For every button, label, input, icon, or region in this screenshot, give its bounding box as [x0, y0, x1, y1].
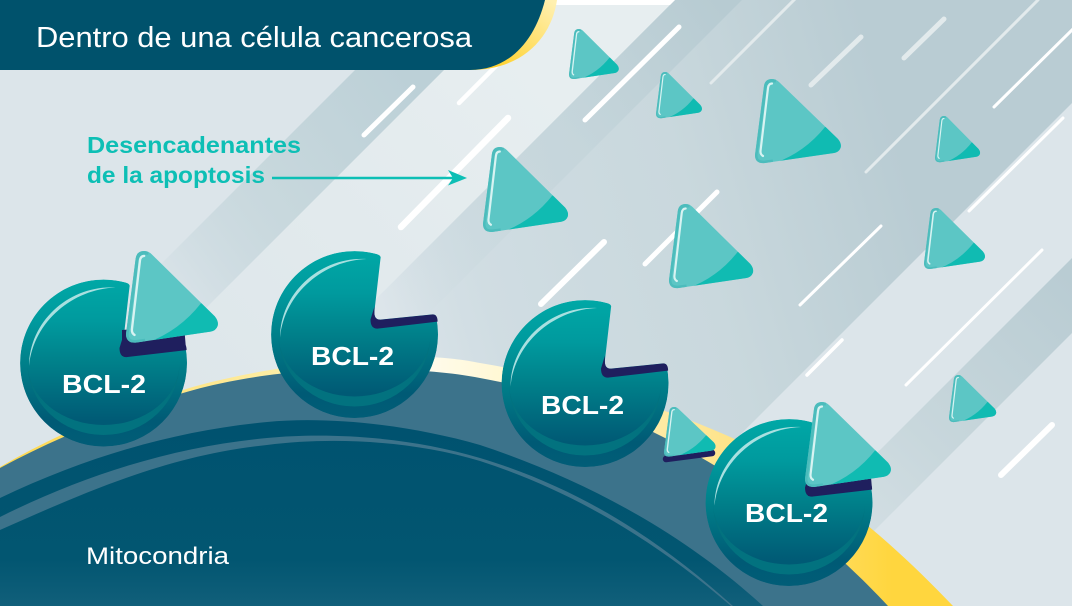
callout: apoptosis triggers: Desencadenantes: [87, 132, 301, 158]
arrow: [272, 170, 467, 186]
BCL-2 protein 2: BCL-2: [311, 341, 394, 371]
trigger 6: [935, 116, 988, 168]
trigger 2: [483, 147, 582, 243]
trigger 4: [569, 29, 627, 86]
header banner: [0, 0, 557, 70]
title: Dentro de una célula cancerosa: [36, 22, 473, 54]
BCL-2 protein 3: [502, 300, 669, 467]
trigger 3: [669, 204, 767, 299]
callout: apoptosis triggers: de la apoptosis: [87, 162, 265, 188]
mitochondrion: [0, 357, 953, 606]
callout: apoptosis triggers: [87, 132, 467, 188]
trigger docked on membrane: [664, 407, 724, 463]
trigger 8: [949, 375, 1004, 428]
BCL-2 protein 4 with bound trigger: [706, 402, 905, 586]
trigger 5: [656, 72, 710, 124]
trigger 1: [755, 79, 855, 174]
trigger 7: [924, 208, 995, 277]
label: Mitocondria: Mitocondria: [86, 543, 230, 570]
BCL-2 protein 3: BCL-2: [541, 390, 624, 420]
white streaks: [364, 0, 1072, 475]
BCL-2 protein 1 with bound trigger: BCL-2: [62, 369, 146, 399]
BCL-2 protein 2: [271, 251, 438, 418]
BCL-2 protein 4 with bound trigger: BCL-2: [745, 498, 828, 528]
free apoptosis triggers: [483, 29, 1004, 428]
BCL-2 protein 1 with bound trigger: [20, 251, 233, 446]
